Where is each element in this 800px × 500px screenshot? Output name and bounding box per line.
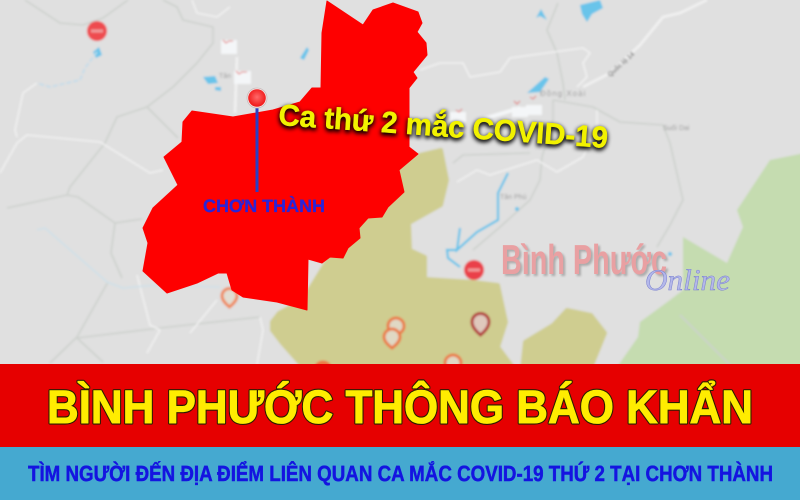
location pins xyxy=(222,288,489,378)
map background xyxy=(0,0,800,378)
town labels on map: Quốc lộ 14 xyxy=(607,51,636,78)
callout: second COVID-19 case: Ca thứ 2 mắc COVID-19 xyxy=(278,98,609,155)
town labels on map: Tân Phú xyxy=(500,193,527,201)
title banner xyxy=(0,364,800,447)
watermark: Bình Phước Online: Bình Phước xyxy=(501,236,667,283)
green forest area xyxy=(615,153,800,370)
industrial markers xyxy=(221,40,542,122)
town labels on map: Tân xyxy=(219,72,231,80)
subtitle banner xyxy=(0,447,800,500)
olive forest area xyxy=(272,150,605,370)
town labels on map: Đồng Xoài xyxy=(540,89,586,98)
watermark: Bình Phước Online: Bình Phước xyxy=(503,238,669,285)
Chơn Thành district red shape xyxy=(143,1,427,310)
water bodies and rivers xyxy=(93,0,672,256)
grey roads xyxy=(7,0,735,370)
town labels on map xyxy=(219,51,690,201)
title: BÌNH PHƯỚC THÔNG BÁO KHẨN xyxy=(47,380,753,433)
callout: second COVID-19 case: Ca thứ 2 mắc COVID-19 xyxy=(277,100,609,157)
stop markers xyxy=(87,21,484,280)
town labels on map: Suối Dai xyxy=(663,124,690,132)
district label: CHƠN THÀNH xyxy=(203,196,325,216)
white roads xyxy=(0,0,707,365)
location marker with stem xyxy=(247,88,267,192)
title: BÌNH PHƯỚC THÔNG BÁO KHẨN xyxy=(47,380,753,433)
watermark: Bình Phước Online: Online xyxy=(645,264,730,297)
